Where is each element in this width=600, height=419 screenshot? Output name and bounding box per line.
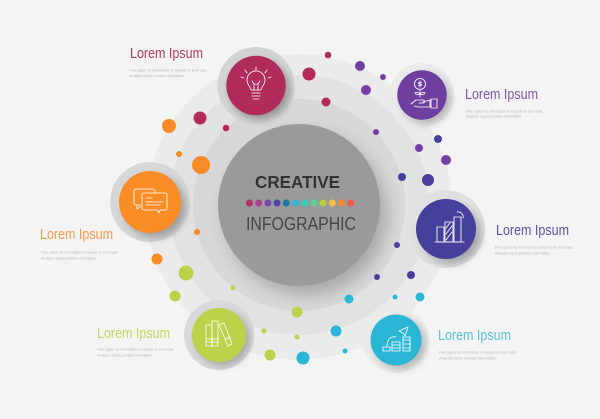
label: crimson: Free space for information to expand on your topic. — [129, 68, 208, 72]
label: crimson — [129, 46, 208, 78]
label: orange — [40, 227, 119, 260]
node: money stacks (teal) — [363, 307, 429, 373]
teal dots — [296, 292, 424, 364]
indigo dots — [374, 135, 442, 280]
label: purple: Free space for information to expand on your topic. — [466, 110, 544, 114]
green dots — [170, 266, 302, 360]
label: orange: Free space for information to expand on your topic. — [41, 250, 119, 254]
rainbow dots row — [246, 200, 354, 206]
crimson dots — [194, 52, 331, 131]
label: crimson: Lorem Ipsum — [130, 46, 203, 62]
label: teal: Free space for information to expand on your topic. — [439, 350, 517, 354]
label: green: Analysis report provides information. — [97, 354, 153, 358]
icon: chat bubbles — [134, 189, 167, 213]
label: orange: Analysis report provides information. — [41, 256, 97, 260]
label: purple: Analysis report provides information. — [466, 114, 522, 118]
label: indigo: Free space for information to expand on your topic. — [495, 246, 574, 250]
label: purple — [465, 87, 544, 118]
label: indigo — [495, 223, 574, 256]
label: orange: Lorem Ipsum — [40, 227, 113, 243]
icon: coin in hand — [411, 78, 437, 108]
concentric rings — [146, 54, 452, 360]
purple dots — [355, 61, 451, 165]
node: finance (purple) — [390, 63, 454, 127]
icon: coins and paper plane — [383, 327, 410, 351]
label: teal: Analysis report provides information. — [439, 356, 497, 360]
label: indigo: Lorem Ipsum — [496, 223, 569, 239]
label: purple: Lorem Ipsum — [465, 87, 538, 103]
icon: books — [206, 321, 232, 346]
label: indigo: Analysis report provides information. — [495, 252, 551, 256]
label: green: Free space for information to expand on your topic. — [97, 348, 175, 352]
label: teal — [438, 328, 517, 360]
label: green — [97, 326, 175, 358]
central circle — [218, 124, 387, 295]
node: books (green) — [184, 300, 254, 370]
heading: infographic: INFOGRAPHIC — [246, 214, 356, 234]
heading: creative: CREATIVE — [255, 172, 340, 192]
label: crimson: Analysis report provides information. — [129, 74, 185, 78]
node: idea (crimson) — [218, 47, 294, 124]
node: growth chart (indigo) — [407, 190, 485, 268]
node: discussion (orange) — [110, 162, 190, 242]
icon: bar chart — [435, 212, 464, 242]
label: green: Lorem Ipsum — [97, 326, 170, 342]
icon: light bulb — [241, 67, 271, 99]
label: teal: Lorem Ipsum — [438, 328, 511, 344]
orange dots — [152, 119, 210, 264]
